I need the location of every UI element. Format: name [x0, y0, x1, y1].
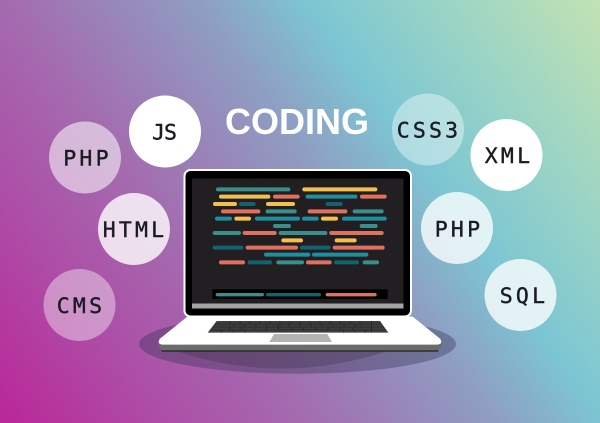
bubble: JS: JS — [152, 120, 176, 146]
bubble: CMS: CMS — [57, 294, 105, 319]
laptop lid — [184, 170, 411, 316]
bubble: SQL: SQL — [500, 284, 548, 309]
touchpad — [269, 334, 332, 342]
bubble: JS — [129, 96, 201, 168]
bubble: SQL — [484, 259, 556, 331]
laptop base — [158, 317, 442, 351]
bubble: CSS3 — [392, 94, 464, 166]
bubble: XML — [470, 119, 542, 191]
bubble: CSS3: CSS3 — [397, 118, 461, 144]
code lines — [215, 189, 385, 262]
screen — [192, 178, 404, 304]
bubble: HTML: HTML — [103, 218, 167, 243]
bottom code bar — [212, 289, 388, 299]
keyboard — [208, 321, 388, 333]
bubble: PHP right: PHP — [435, 218, 483, 242]
bubble: PHP right — [421, 192, 493, 264]
screen status bar — [192, 304, 404, 308]
laptop — [139, 170, 456, 374]
bubble: CMS — [44, 269, 116, 341]
bubble: HTML — [98, 193, 170, 265]
title: CODING — [225, 101, 369, 142]
laptop shadow — [139, 314, 456, 374]
bubble: PHP left: PHP — [63, 146, 112, 172]
bubble: XML: XML — [485, 144, 533, 169]
bubble: PHP left — [49, 122, 121, 194]
